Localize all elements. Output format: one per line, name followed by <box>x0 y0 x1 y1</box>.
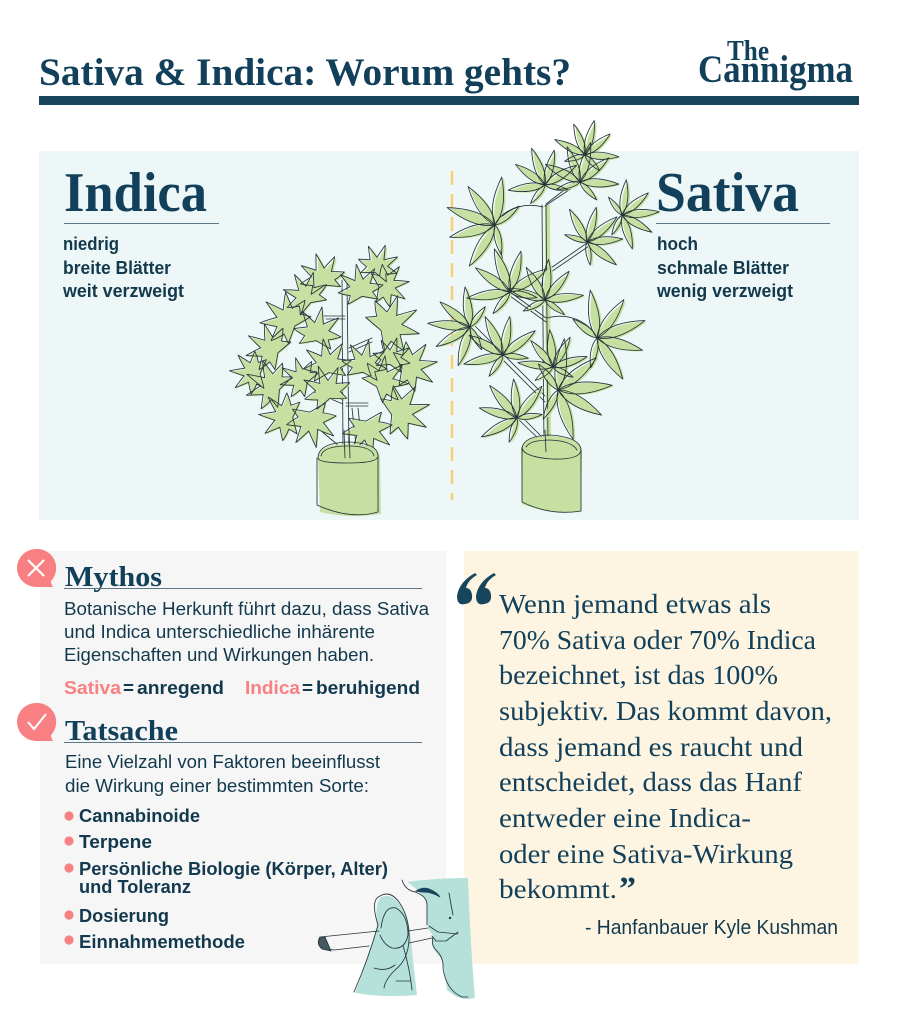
text: myth description: Eigenschaften und Wirkungen haben. <box>64 644 374 665</box>
text: quote: oder eine Sativa-Wirkung <box>499 838 793 869</box>
text: quote: entscheidet, dass das Hanf <box>499 766 803 797</box>
text: fact intro <box>65 751 380 796</box>
title bar <box>39 96 859 105</box>
icon: opening quote mark <box>457 573 496 604</box>
text: Sativa traits: schmale Blätter <box>657 257 789 278</box>
text: quote: bekommt. <box>499 873 617 904</box>
icon: myth cross bubble <box>17 549 56 587</box>
illustration: indica plant <box>228 238 443 516</box>
list: factors: Einnahmemethode <box>79 931 245 952</box>
text: myth equations: = <box>123 677 134 698</box>
text: myth description <box>64 598 430 665</box>
text: fact intro: Eine Vielzahl von Faktoren beeinflusst <box>65 751 380 772</box>
text: quote: dass jemand es raucht und <box>499 731 803 762</box>
text: quote: ” <box>619 871 636 907</box>
text: Indica traits: weit verzweigt <box>62 280 184 301</box>
text: myth equations: anregend <box>137 677 224 698</box>
text: myth equations: Indica <box>245 677 301 698</box>
heading: Mythos: Mythos <box>65 561 162 593</box>
list: factors: und Toleranz <box>79 876 191 897</box>
panel: plant comparison <box>39 151 859 520</box>
logo: The Cannigma: Cannigma <box>698 48 853 91</box>
text: Sativa traits: hoch <box>657 233 698 254</box>
text: Indica traits <box>62 233 184 301</box>
text: quote: Wenn jemand etwas als <box>499 588 771 619</box>
heading: Tatsache: Tatsache <box>65 715 178 747</box>
list: factors: Terpene <box>79 831 152 852</box>
text: myth equations: = <box>302 677 313 698</box>
illustration: hand with joint and face <box>318 878 475 999</box>
text: Indica traits: niedrig <box>63 233 119 254</box>
text: Sativa traits: wenig verzweigt <box>656 280 793 301</box>
text: quote: 70% Sativa oder 70% Indica <box>499 624 816 655</box>
text: quote attribution: - Hanfanbauer Kyle Kushman <box>585 917 838 939</box>
panel: quote <box>464 551 859 964</box>
text: quote: subjektiv. Das kommt davon, <box>499 695 832 726</box>
text: myth equations <box>64 677 420 698</box>
heading: Sativa: Sativa <box>656 162 799 224</box>
list: factors: Persönliche Biologie (Körper, Alter) <box>79 858 388 879</box>
text: myth description: Botanische Herkunft führt dazu, dass Sativa <box>64 598 430 619</box>
list: factors: Cannabinoide <box>79 805 200 826</box>
icon: indica pot <box>317 430 381 516</box>
text: quote: entweder eine Indica- <box>499 802 751 833</box>
heading: Indica: Indica <box>64 162 207 224</box>
text: quote <box>499 588 832 907</box>
panel: myth and fact <box>40 551 446 964</box>
list: factors <box>64 805 388 952</box>
logo: The Cannigma: The <box>727 35 769 67</box>
dashed divider <box>451 171 453 500</box>
text: Sativa traits <box>656 233 793 301</box>
text: fact intro: die Wirkung einer bestimmten Sorte: <box>65 775 369 796</box>
text: quote: bezeichnet, ist das 100% <box>499 659 778 690</box>
icon: sativa pot <box>521 430 582 513</box>
text: myth equations: beruhigend <box>316 677 420 698</box>
text: Indica traits: breite Blätter <box>63 257 171 278</box>
title: Sativa & Indica: Worum gehts? <box>39 50 571 94</box>
icon: fact check bubble <box>17 703 56 741</box>
text: myth equations: Sativa <box>64 677 122 698</box>
list: factors: Dosierung <box>79 905 169 926</box>
text: myth description: und Indica unterschiedliche inhärente <box>64 621 375 642</box>
illustration: sativa plant <box>424 112 664 513</box>
